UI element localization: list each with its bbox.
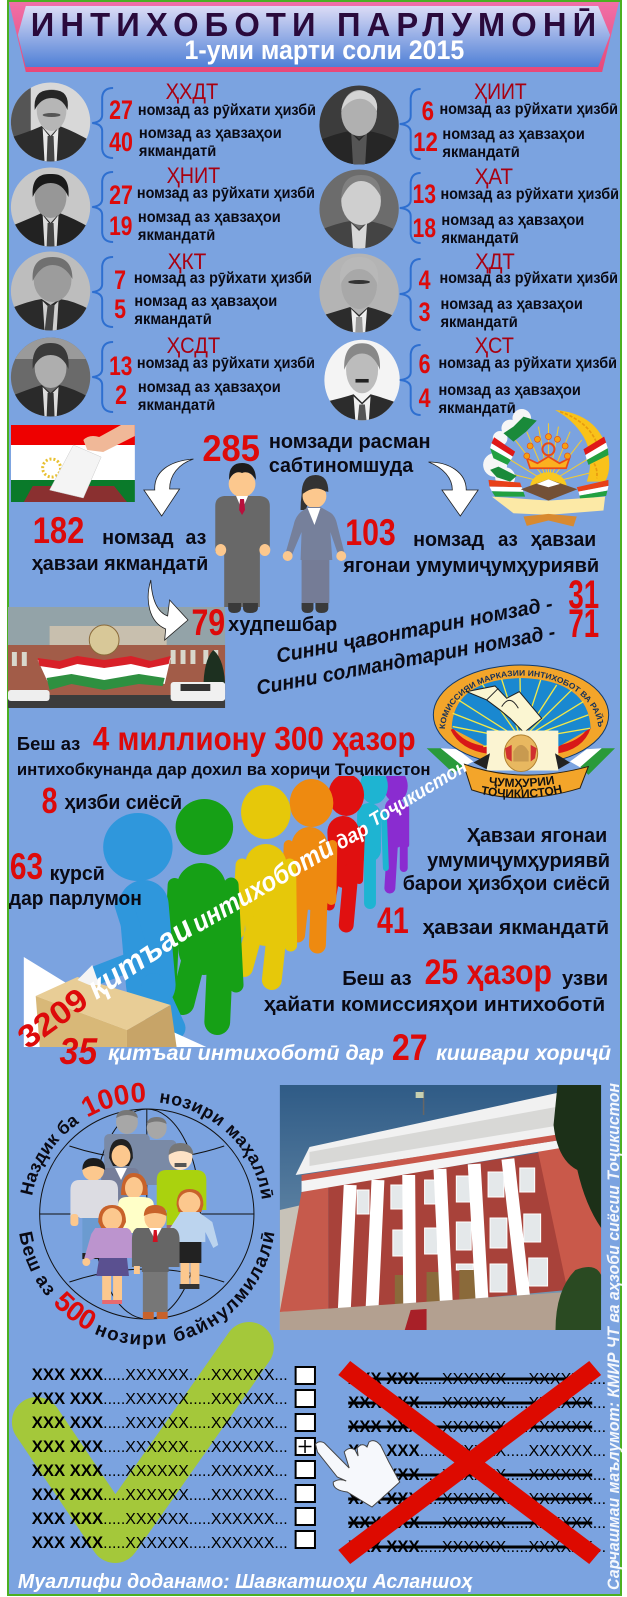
single-mandate constituencies: 41	[377, 900, 409, 941]
count: party list: 27	[109, 95, 133, 125]
source vertical text: Сарчашмаи маълумот: КМИР ЧТ ва аҳзоби сиёсии Тоҷикистон	[605, 1083, 623, 1590]
total candidates label: номзади расман	[269, 431, 431, 453]
big red cross	[338, 1361, 601, 1564]
portrait	[320, 254, 399, 332]
white entablature	[296, 1092, 563, 1175]
number of parties: 8	[42, 781, 58, 821]
arrow: to constituency candidates	[144, 459, 193, 516]
person: woman yellow top	[118, 1173, 154, 1233]
row 6: .....XXXXXX.....XXXXXX...	[103, 1487, 288, 1504]
coat of arms of Tajikistan	[483, 409, 609, 527]
brace	[400, 259, 421, 330]
figure: yellow	[238, 785, 291, 980]
count: party list: 13	[109, 351, 132, 381]
observers text around globe: Беш аз	[19, 1232, 54, 1296]
number of seats: курсӣ	[50, 863, 105, 885]
single-mandate constituencies	[377, 900, 609, 941]
polling stations abroad: 27	[392, 1027, 428, 1068]
wheat	[555, 410, 609, 482]
crossed-out list: .....XXXXXX.....XXXXXX...	[420, 1467, 606, 1484]
party name: ҲДТ	[475, 249, 515, 274]
row 8: XXX XXX	[32, 1533, 104, 1552]
illustration: ballot box	[24, 957, 206, 1047]
crossed-out list: XXX XXX	[348, 1393, 420, 1412]
emblem: central election commission: ҶУМҲУРИИ	[490, 776, 554, 790]
commission members	[264, 953, 608, 1016]
party row: ҲХДТ	[9, 79, 316, 164]
crossed-out list: .....XXXXXX.....XXXXXX...	[420, 1443, 606, 1460]
crossed-out list: XXX XXX	[348, 1441, 420, 1460]
row 3: XXX XXX	[32, 1413, 104, 1432]
globe wireframe	[40, 1109, 254, 1319]
youngest candidate age: 31	[568, 573, 599, 617]
list candidates label: номзад	[413, 529, 484, 551]
polling stations in Tajikistan, perspective text: дар	[332, 818, 373, 854]
brace	[92, 257, 113, 327]
list candidates label line 2: ягонаи умумиҷумҳуриявӣ	[342, 555, 599, 577]
portrait	[317, 83, 401, 167]
person: woman lilac	[82, 1205, 132, 1304]
row 7: XXX XXX	[32, 1509, 104, 1528]
crossed-out list: XXX XXX	[348, 1489, 420, 1508]
emblem: central election commission: ТОҶИКИСТОН	[482, 784, 562, 800]
number of seats: дар парлумон	[9, 888, 142, 910]
left wing	[280, 1205, 302, 1330]
brace	[92, 88, 113, 158]
label: constituency: якмандатӣ	[138, 227, 215, 244]
total candidates number: 285	[202, 428, 260, 469]
party name: ҲСДТ	[167, 333, 220, 358]
label: constituency: якмандатӣ	[440, 314, 518, 331]
row 5	[32, 1461, 315, 1480]
list candidates label: аз	[498, 529, 518, 551]
crossed-out list: XXX XXX	[348, 1537, 420, 1556]
label: constituency: якмандатӣ	[138, 397, 215, 414]
party name: ҲСТ	[475, 333, 514, 358]
row 4, marked	[32, 1437, 315, 1456]
person: woman dark hair	[101, 1139, 139, 1203]
constituency candidates label	[102, 527, 206, 549]
portrait	[322, 337, 402, 423]
row 6: XXX XXX	[32, 1485, 104, 1504]
hands and ballot	[467, 686, 542, 733]
label: constituency: номзад аз ҳавзаҳои	[139, 125, 282, 142]
rays	[502, 423, 595, 483]
label: constituency	[438, 382, 581, 417]
label: constituency	[139, 125, 282, 160]
row 7	[32, 1508, 315, 1528]
label: constituency: номзад аз ҳавзаҳои	[138, 209, 281, 226]
number of seats	[9, 846, 142, 910]
count: constituency: 2	[115, 380, 127, 410]
voters heading: Беш аз	[17, 733, 80, 754]
mountain	[521, 479, 577, 501]
row 6	[32, 1485, 315, 1504]
count: constituency: 5	[114, 294, 126, 324]
count: constituency: 4	[419, 383, 431, 413]
brace	[92, 172, 113, 242]
party row: ҲАТ	[317, 164, 619, 251]
party row: ҲДТ	[317, 249, 618, 335]
doors	[394, 1270, 476, 1304]
trees	[554, 1085, 601, 1228]
label: constituency	[440, 296, 583, 331]
right wing	[580, 748, 615, 775]
illustration: queue of voters	[97, 768, 408, 1028]
oldest candidate age: Синни солмандтарин номзад -	[255, 621, 557, 700]
rays	[453, 678, 590, 747]
single constituency text: барои ҳизбҳои сиёсӣ	[403, 873, 610, 895]
polling stations number: 3209	[11, 981, 94, 1056]
row 1	[32, 1365, 315, 1384]
row 4, marked: XXX XXX	[32, 1437, 104, 1456]
label: constituency: якмандатӣ	[134, 311, 212, 328]
left wing	[427, 748, 463, 773]
commission members: ҳайати комиссияҳои интихоботӣ	[264, 994, 605, 1016]
count: constituency: 40	[109, 127, 133, 157]
party row: ҲСТ	[322, 333, 617, 423]
count: constituency: 18	[413, 213, 436, 243]
icon: man in suit	[215, 463, 270, 613]
party name: ҲАТ	[475, 164, 513, 189]
author credit: Муаллифи доданамо: Шавкатшоҳи Асланшоҳ	[18, 1571, 474, 1593]
label: party list: номзад аз рӯйхати ҳизбӣ	[137, 185, 315, 202]
observers text around globe: 500	[55, 1291, 96, 1329]
figure: purple	[384, 770, 408, 888]
label: constituency: номзад аз ҳавзаҳои	[442, 126, 585, 143]
polling stations in Tajikistan, perspective text: интихоботӣ	[186, 832, 339, 938]
observers text around globe: 1000	[82, 1082, 145, 1117]
figure: green	[170, 799, 236, 1022]
constituency candidates label: номзад	[102, 527, 174, 549]
label: constituency	[442, 126, 585, 161]
number of parties: ҳизби сиёсӣ	[64, 792, 182, 814]
windows	[357, 1168, 548, 1292]
single-mandate constituencies: ҳавзаи якмандатӣ	[423, 917, 609, 939]
emblem: central election commission	[426, 664, 615, 800]
list candidates number: 103	[345, 512, 396, 553]
brace	[400, 345, 421, 415]
label: party list: номзад аз рӯйхати ҳизбӣ	[138, 102, 316, 119]
person: woman blue top	[166, 1189, 218, 1289]
voters heading: 4 миллиону 300 ҳазор	[93, 720, 416, 757]
polling stations in Tajikistan, perspective text: қитъаи	[80, 909, 199, 1006]
flag	[423, 1090, 425, 1115]
label: constituency: номзад аз ҳавзаҳои	[440, 296, 583, 313]
party row: ҲИИТ	[317, 79, 618, 167]
crossed-out list: .....XXXXXX.....XXXXXX...	[420, 1395, 606, 1412]
portrait	[9, 165, 92, 249]
row 4, marked: .....XXXXXX.....XXXXXX...	[103, 1439, 288, 1456]
subtitle: 1-уми марти соли 2015	[185, 35, 464, 65]
count: party list: 27	[109, 180, 133, 210]
columns	[344, 1159, 524, 1312]
row 3	[32, 1413, 315, 1432]
count: constituency: 12	[413, 127, 438, 157]
constituency candidates label line 2: ҳавзаи якмандатӣ	[32, 553, 208, 575]
voters description: интихобкунанда дар дохил ва хориҷи Тоҷикистон	[17, 760, 431, 779]
label: party list: номзад аз рӯйхати ҳизбӣ	[134, 270, 312, 287]
independents number: 79	[191, 602, 225, 643]
label: constituency: якмандатӣ	[441, 230, 519, 247]
party row: ҲКТ	[9, 249, 312, 333]
total candidates label: сабтиномшуда	[269, 455, 414, 477]
red walls	[280, 1186, 328, 1312]
list candidates label	[413, 529, 596, 551]
row 3: .....XXXXXX.....XXXXXX...	[103, 1415, 288, 1432]
polling stations abroad: кишвари хориҷӣ	[436, 1042, 611, 1065]
count: party list: 7	[114, 265, 126, 295]
observers text around globe: нозири байнулмилалӣ	[95, 1232, 274, 1349]
number of parties	[42, 781, 182, 821]
polling stations in Tajikistan, perspective text	[80, 756, 471, 1006]
commission members: узви	[562, 968, 608, 990]
person: man in suit	[132, 1205, 180, 1319]
constituency candidates label: аз	[186, 527, 206, 549]
sun	[530, 472, 567, 487]
label: constituency	[134, 293, 277, 328]
label: party list: номзад аз рӯйхати ҳизбӣ	[438, 355, 617, 372]
label: constituency	[138, 379, 281, 414]
observers text around globe: Наздик ба	[20, 1116, 80, 1195]
crown	[527, 457, 569, 468]
label: constituency: якмандатӣ	[442, 144, 520, 161]
commission members: Беш аз	[342, 968, 412, 990]
party name: ҲНИТ	[167, 163, 220, 188]
row 1: XXX XXX	[32, 1365, 104, 1384]
arrow: to list candidates	[429, 462, 478, 516]
base	[523, 514, 577, 527]
party name: ҲКТ	[168, 249, 206, 274]
label: constituency: якмандатӣ	[438, 400, 516, 417]
ring text: КОМИССИЯИ МАРКАЗИИ ИНТИХОБОТ ВА РАЙЪПУРСИ	[439, 670, 604, 729]
crossed-out list: .....XXXXXX.....XXXXXX...	[420, 1371, 606, 1388]
portrait	[317, 167, 401, 251]
youngest candidate age: Синни ҷавонтарин номзад -	[275, 593, 555, 668]
image: flag with ballot	[11, 425, 135, 502]
party row: ҲНИТ	[9, 163, 315, 249]
steps	[280, 1292, 562, 1330]
polling stations abroad: 35	[60, 1031, 98, 1072]
image: government building with flags	[8, 607, 225, 708]
count: party list: 13	[413, 179, 436, 209]
count: party list: 6	[422, 96, 434, 126]
icon: hand cursor	[315, 1441, 400, 1507]
label: party list: номзад аз рӯйхати ҳизбӣ	[440, 186, 619, 203]
figure: cyan	[360, 768, 388, 903]
arrow: to independents	[148, 580, 188, 640]
portrait	[9, 80, 92, 164]
ballot list with checkboxes	[32, 1365, 315, 1552]
title banner	[9, 2, 619, 72]
dark folds	[473, 753, 490, 769]
person: grey man back right	[141, 1117, 177, 1185]
independents label: худпешбар	[228, 614, 337, 636]
red wedges	[451, 728, 488, 754]
person: grey man back left	[104, 1110, 150, 1184]
row 5: XXX XXX	[32, 1461, 104, 1480]
label: party list: номзад аз рӯйхати ҳизбӣ	[439, 101, 618, 118]
party name: ҲИИТ	[474, 79, 527, 104]
row 8	[32, 1531, 315, 1552]
banner	[463, 764, 588, 798]
box	[487, 731, 558, 771]
figure: orange	[287, 779, 333, 945]
cotton	[483, 409, 531, 487]
figure: blue	[97, 813, 174, 1028]
ribbons	[491, 437, 515, 457]
count: constituency: 19	[109, 211, 132, 241]
icon: woman in suit	[283, 475, 346, 613]
person: man grey shirt	[70, 1158, 118, 1259]
brace	[92, 342, 113, 412]
label: constituency: номзад аз ҳавзаҳои	[441, 212, 584, 229]
oldest candidate age: 71	[568, 602, 599, 646]
brace	[400, 89, 421, 159]
crossed-out list: XXX XXX	[348, 1417, 420, 1436]
crossed-out list: .....XXXXXX.....XXXXXX...	[420, 1515, 606, 1532]
count: party list: 4	[419, 265, 431, 295]
crossed-out list: .....XXXXXX.....XXXXXX...	[420, 1491, 606, 1508]
row 1: .....XXXXXX.....XXXXXX...	[103, 1367, 288, 1384]
stars	[524, 434, 570, 459]
crossed-out list	[348, 1369, 606, 1556]
party name: ҲХДТ	[166, 79, 218, 104]
label: constituency: якмандатӣ	[139, 143, 216, 160]
crossed-out list: .....XXXXXX.....XXXXXX...	[420, 1539, 606, 1556]
polling stations in Tajikistan, perspective text: Тоҷикистон	[366, 756, 471, 831]
observers text around globe: нозири маҳаллӣ	[160, 1093, 274, 1199]
label: party list: номзад аз рӯйхати ҳизбӣ	[137, 355, 315, 372]
row 2	[32, 1389, 315, 1408]
person: older man green shirt	[157, 1143, 206, 1245]
big check mark	[37, 1347, 249, 1538]
number of seats: 63	[10, 846, 43, 887]
row 2: .....XXXXXX.....XXXXXX...	[103, 1391, 288, 1408]
single constituency text	[403, 825, 610, 895]
crossed-out list: XXX XXX	[348, 1369, 420, 1388]
inner blue field	[452, 678, 591, 747]
label: constituency	[138, 209, 281, 244]
small emblem	[504, 735, 538, 772]
image: parliament building	[280, 1085, 601, 1330]
crossed-out list: .....XXXXXX.....XXXXXX...	[420, 1419, 606, 1436]
crossed-out list: XXX XXX	[348, 1513, 420, 1532]
commission members: 25 ҳазор	[425, 953, 552, 992]
figure: red	[328, 774, 364, 925]
count: party list: 6	[419, 349, 431, 379]
main title: ИНТИХОБОТИ ПАРЛУМОНӢ	[31, 6, 596, 43]
portrait	[9, 249, 92, 333]
book	[492, 497, 605, 515]
label: constituency: номзад аз ҳавзаҳои	[138, 379, 281, 396]
row 2: XXX XXX	[32, 1389, 104, 1408]
single constituency text: Ҳавзаи ягонаи	[467, 825, 607, 847]
polling stations abroad: қитъаи интихоботӣ дар	[108, 1042, 384, 1065]
brace	[400, 173, 421, 243]
party row: ҲСДТ	[9, 333, 315, 419]
crossed-out list: XXX XXX	[348, 1465, 420, 1484]
illustration: group of people	[70, 1110, 218, 1319]
constituency candidates number: 182	[33, 510, 84, 551]
single constituency text: умумиҷумҳуриявӣ	[427, 850, 610, 872]
list candidates label: ҳавзаи	[531, 529, 596, 551]
label: constituency	[441, 212, 584, 247]
row 7: .....XXXXXX.....XXXXXX...	[103, 1511, 288, 1528]
polling stations abroad	[60, 1027, 611, 1072]
label: constituency: номзад аз ҳавзаҳои	[134, 293, 277, 310]
count: constituency: 3	[419, 297, 431, 327]
label: party list: номзад аз рӯйхати ҳизбӣ	[439, 270, 618, 287]
row 5: .....XXXXXX.....XXXXXX...	[103, 1463, 288, 1480]
observers text around globe	[19, 1082, 274, 1349]
portrait	[9, 335, 92, 419]
outer ring	[433, 665, 609, 765]
row 8: .....XXXXXX.....XXXXXX...	[103, 1535, 288, 1552]
label: constituency: номзад аз ҳавзаҳои	[438, 382, 581, 399]
total candidates label	[269, 431, 431, 477]
